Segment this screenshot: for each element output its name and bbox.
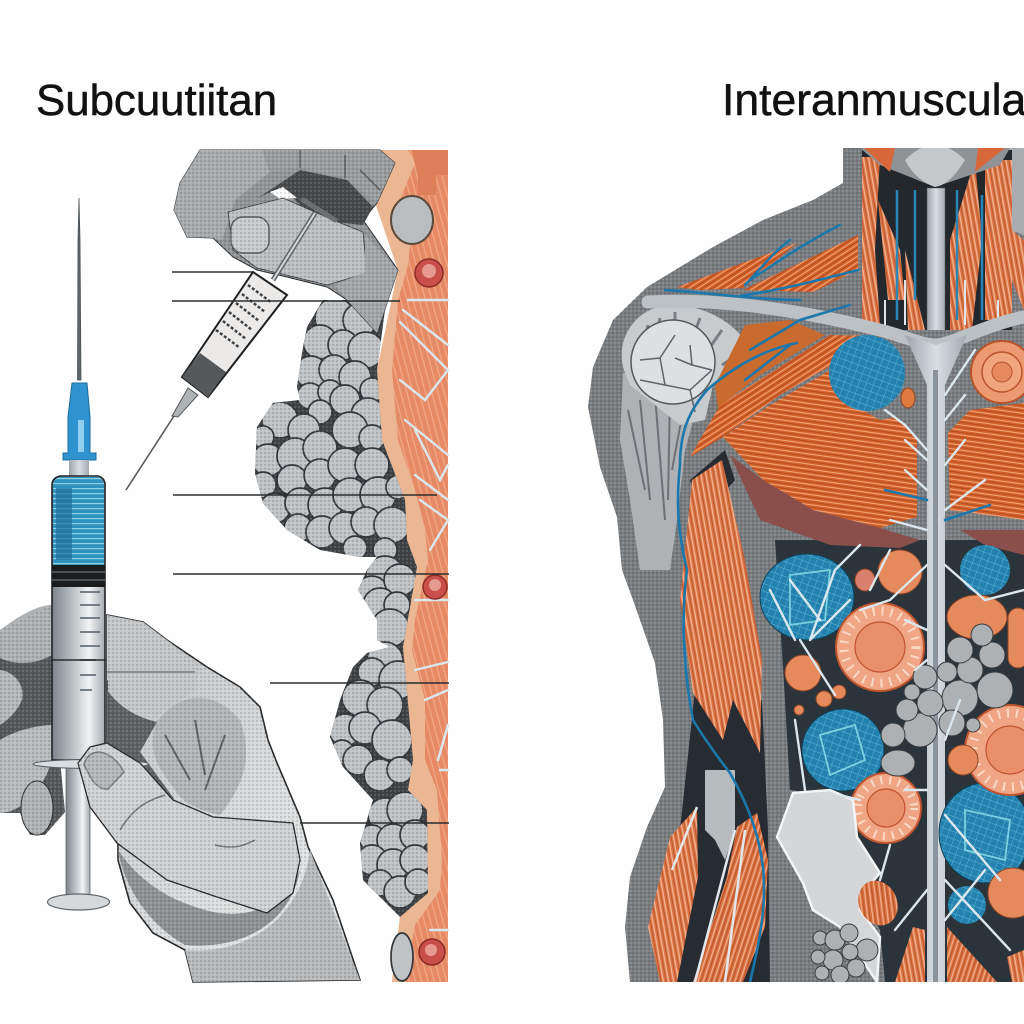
- arm biceps muscle: [680, 460, 762, 753]
- finger flange: [33, 760, 149, 768]
- upper trapezius muscles: [665, 225, 858, 300]
- grey nodules lower: [811, 924, 878, 984]
- plunger rod: [66, 768, 90, 896]
- skin and muscle strip: [376, 150, 448, 982]
- hand behind barrel: [0, 605, 360, 982]
- icon: large syringe held in hand: [0, 198, 360, 982]
- shoulder joint: [622, 305, 747, 425]
- clavicle and sternum: [648, 301, 1024, 982]
- chin: [860, 148, 1010, 187]
- lower muscles: [851, 874, 1024, 982]
- title: intramuscular heading: Interanmuscula: [722, 76, 1024, 125]
- pectoral muscles: [690, 320, 1024, 555]
- needle hub: [63, 383, 96, 460]
- grey lobule inside skin: [391, 196, 433, 244]
- panel: subcutaneous tissue layer: [250, 150, 448, 982]
- pelvic bone: [777, 790, 880, 982]
- barrel with liquid: [52, 476, 105, 760]
- dark body cavity: [775, 540, 1024, 982]
- thumbnail: [231, 217, 269, 253]
- arm grey streaked muscle: [620, 373, 693, 570]
- white nerve branches: [745, 305, 1024, 950]
- trachea: [927, 188, 945, 334]
- orange ring organs: [836, 341, 1024, 843]
- title: subcutaneous heading: Subcuutiitan: [36, 76, 277, 125]
- fat lobules: [250, 295, 435, 981]
- icon: small angled syringe: [126, 200, 335, 490]
- forearm muscles: [648, 770, 768, 982]
- panel: intramuscular torso anatomy: [588, 145, 1024, 984]
- blue glands upper: [760, 335, 1024, 924]
- small orange nodules: [785, 388, 1024, 918]
- grey nodule cluster: [881, 624, 1013, 776]
- neck muscles: [862, 150, 1024, 334]
- needle: [78, 198, 81, 380]
- thumb: [78, 743, 300, 913]
- torso silhouette: [588, 148, 1024, 982]
- label leader lines: [107, 272, 449, 823]
- icon: hand pinching skin: [174, 150, 398, 333]
- red vessel cross-sections: [415, 259, 447, 965]
- blood vessels on arm: [678, 343, 797, 982]
